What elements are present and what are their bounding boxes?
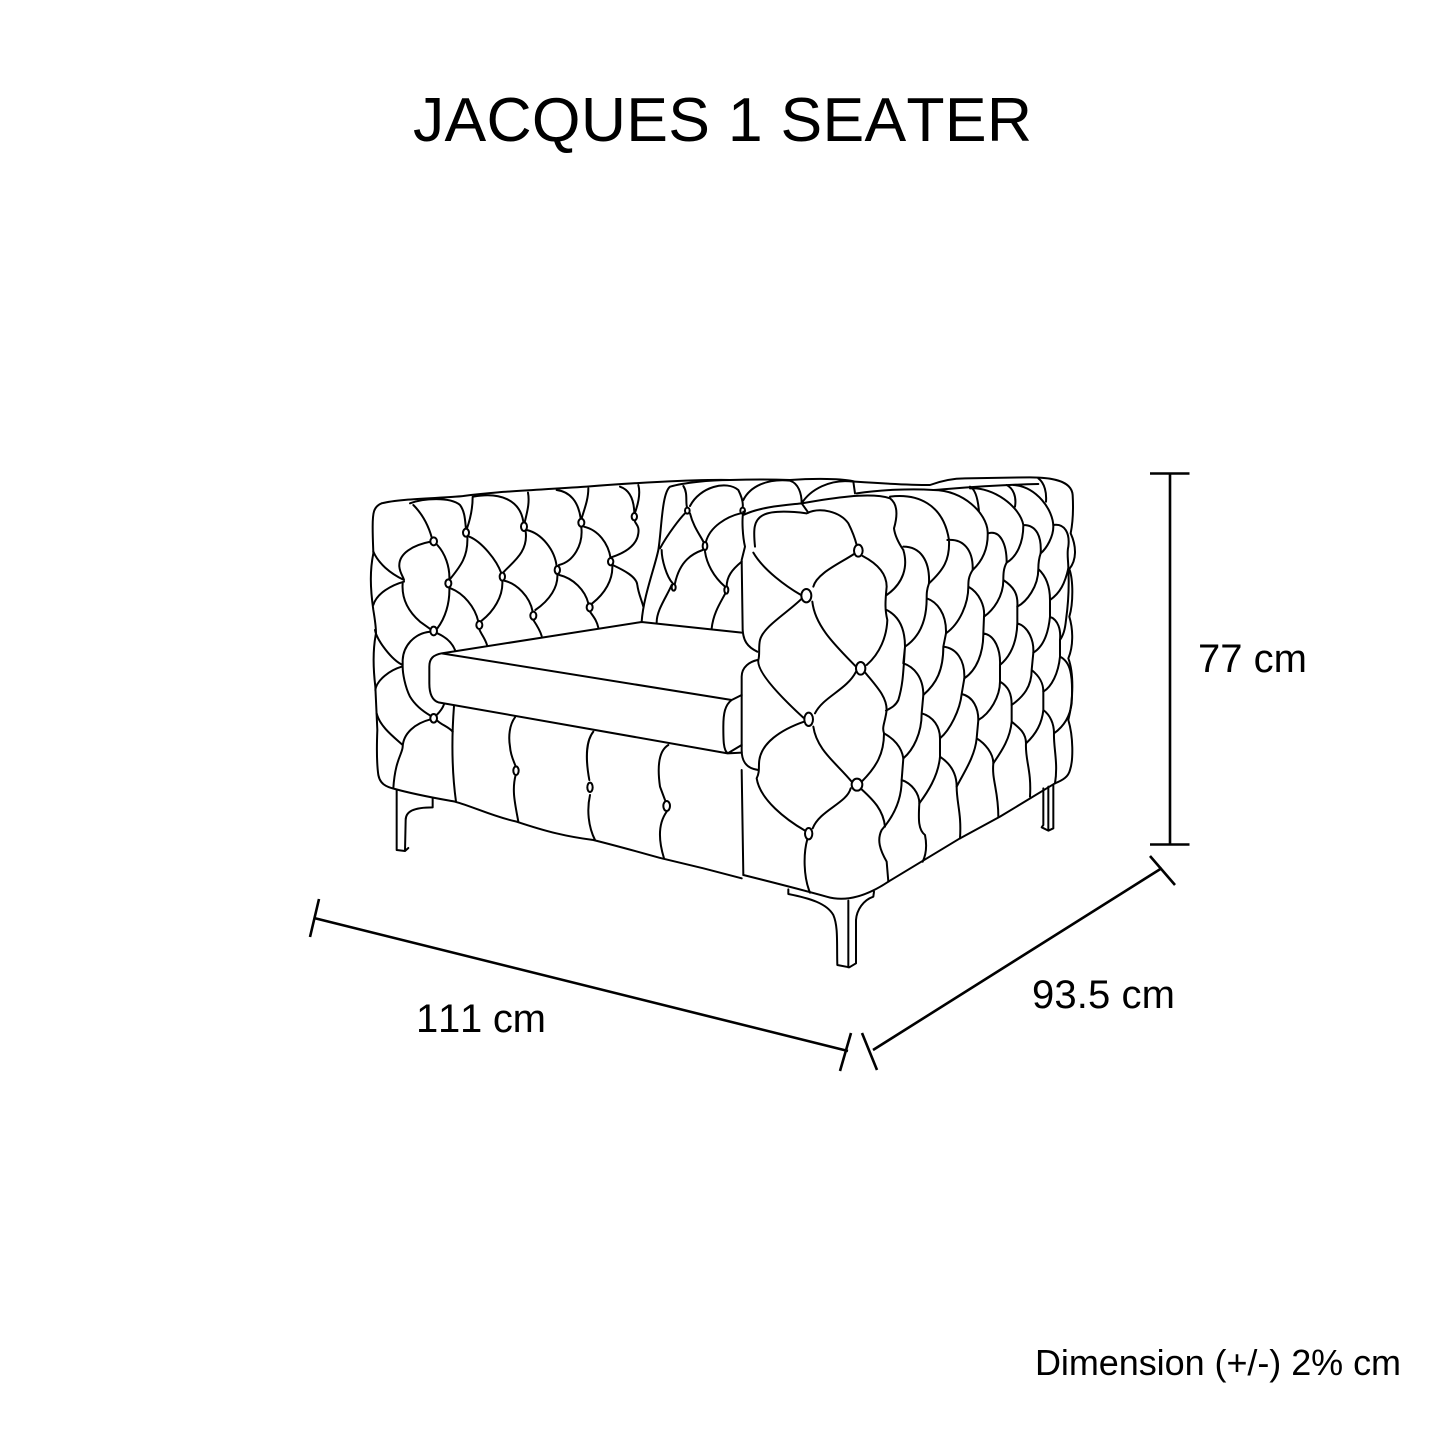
top cushion seams xyxy=(743,480,1038,513)
tufting buttons left xyxy=(430,508,745,811)
front base panels xyxy=(452,706,668,858)
front arm panel outline xyxy=(742,489,933,875)
right part of chair: front arm and side panel xyxy=(730,477,1075,967)
left arm and back tufting seams xyxy=(373,485,643,788)
side panel tufting xyxy=(887,478,1069,647)
dimension tolerance note: Dimension (+/-) 2% cm xyxy=(1035,1342,1401,1383)
rear right leg xyxy=(1042,785,1053,831)
height label: 77 cm xyxy=(1198,637,1307,681)
title: JACQUES 1 SEATER xyxy=(413,85,1032,155)
illustration: tufted armchair line drawing xyxy=(371,477,1075,967)
tufting buttons right xyxy=(801,545,865,839)
chair outer silhouette left xyxy=(371,480,742,878)
height dimension line xyxy=(1150,473,1190,845)
width dimension line xyxy=(310,899,851,1071)
top and right outline xyxy=(730,477,1075,899)
left rear leg xyxy=(397,790,433,851)
width label: 111 cm xyxy=(416,997,546,1041)
front arm diamonds xyxy=(753,510,887,893)
depth dimension line xyxy=(862,856,1175,1070)
left part of chair: back, left arm, seat and front base xyxy=(371,480,745,878)
seat cushion xyxy=(429,622,742,753)
depth label: 93.5 cm xyxy=(1032,973,1175,1017)
back inner panel seams xyxy=(642,480,743,628)
front right leg xyxy=(788,889,874,967)
